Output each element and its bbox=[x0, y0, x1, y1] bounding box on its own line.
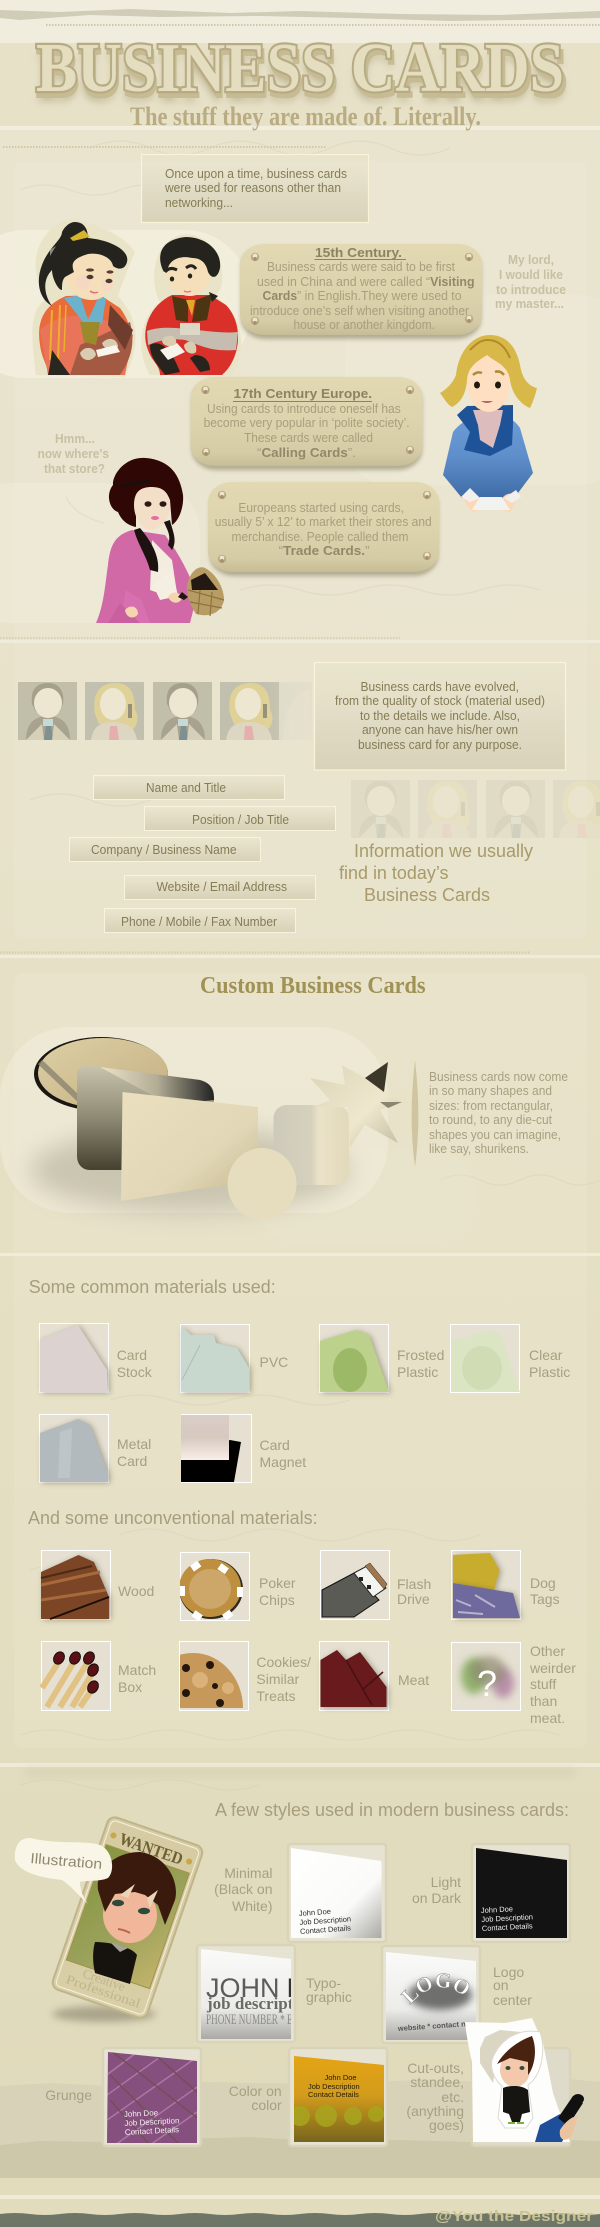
plaque: 17th century europe: Using cards to introduce oneself has bbox=[207, 401, 401, 416]
tile: metal card: Metal bbox=[117, 1436, 151, 1452]
backdrop blob behind lady bbox=[0, 483, 200, 623]
sample card: color on color: Job Description bbox=[308, 2082, 360, 2091]
evolved text box bbox=[314, 662, 566, 770]
star card bbox=[310, 1062, 402, 1147]
tile: other weird stuff bbox=[452, 1642, 576, 1726]
plaque: trade cards: merchandise. People called them bbox=[232, 529, 408, 544]
sample card: grunge bbox=[100, 2048, 201, 2146]
label: cut-outs: Cut-outs, bbox=[407, 2060, 464, 2076]
tile: meat bbox=[320, 1642, 429, 1710]
label: minimal: (Black on bbox=[214, 1881, 272, 1897]
label: phone bbox=[104, 908, 296, 932]
plaque: 15th century: introduce one’s self when visiting another bbox=[250, 303, 470, 318]
sample card: typographic: PHONE NUMBER * EMAIL bbox=[206, 2012, 316, 2028]
label: website bbox=[124, 876, 316, 900]
plaque: 15th century: 15th Century. bbox=[315, 245, 402, 260]
tile: flash drive bbox=[320, 1550, 431, 1620]
intro text box: networking... bbox=[165, 195, 233, 210]
evolved text box: business card for any purpose. bbox=[358, 737, 522, 752]
tile: cookies: Treats bbox=[256, 1688, 296, 1704]
label: logo: Logo bbox=[493, 1964, 524, 1980]
label: position: Position / Job Title bbox=[192, 812, 289, 827]
tile: pvc bbox=[180, 1324, 288, 1392]
label: name and title: Name and Title bbox=[146, 780, 226, 795]
tile: wood: Wood bbox=[118, 1583, 154, 1599]
tile: wood bbox=[41, 1550, 154, 1620]
tile: meat: Meat bbox=[398, 1672, 429, 1688]
plaque: trade cards: usually 5’ x 12’ to market their stores and bbox=[215, 514, 432, 529]
tile: clear plastic: Clear bbox=[529, 1347, 563, 1363]
sample card: minimal: Contact Details bbox=[300, 1923, 351, 1936]
sample card: minimal bbox=[288, 1844, 386, 1942]
faded figure strip right bbox=[351, 780, 600, 838]
plaque: 17th century europe: become very popular in ‘polite society’. bbox=[204, 415, 410, 430]
decorative lens divider bbox=[412, 1060, 418, 1167]
tile: poker chips bbox=[179, 1552, 296, 1621]
label: phone: Phone / Mobile / Fax Number bbox=[121, 914, 278, 929]
wanted card illustration: Professional bbox=[64, 1971, 143, 2011]
label: minimal bbox=[214, 1865, 272, 1914]
common materials heading: Some common materials used: bbox=[29, 1277, 276, 1297]
label: cut-outs bbox=[406, 2060, 464, 2133]
rounded square card bbox=[274, 1105, 349, 1185]
backdrop blob behind blonde man bbox=[345, 295, 600, 485]
label: logo: on bbox=[493, 1977, 509, 1993]
tile: frosted plastic: Plastic bbox=[397, 1364, 438, 1380]
shapes description bbox=[429, 1069, 568, 1156]
speech: my lord: My lord, bbox=[508, 252, 554, 267]
speech: my lord: to introduce bbox=[496, 282, 566, 297]
wanted card illustration: Creative bbox=[81, 1965, 127, 1994]
rounded content panel 1 bbox=[14, 161, 587, 938]
credit: @You the Designer bbox=[435, 2208, 593, 2225]
evolved text box: anyone can have his/her own bbox=[362, 722, 518, 737]
speech: my lord: I would like bbox=[499, 267, 563, 282]
sample card: minimal: John Doe bbox=[299, 1907, 331, 1918]
illustration: die-cut shapes bbox=[30, 1037, 402, 1220]
wanted card illustration: WANTED bbox=[117, 1829, 185, 1869]
subtitle: The stuff they are made of. Literally. bbox=[130, 102, 481, 131]
tile: other weird stuff: Other bbox=[530, 1643, 565, 1659]
plaque: trade cards: “Trade Cards.” bbox=[279, 543, 370, 558]
label: light on dark bbox=[412, 1874, 462, 1906]
tile: other weird stuff: ? bbox=[477, 1663, 497, 1704]
tile: cookies: Similar bbox=[256, 1671, 300, 1687]
illustration: blonde gentleman bbox=[440, 335, 537, 512]
label: minimal: White) bbox=[232, 1898, 272, 1914]
sample card: light on dark: Contact Details bbox=[482, 1921, 533, 1933]
sample card: cut-outs bbox=[465, 2018, 584, 2146]
egg shaped card bbox=[228, 1148, 296, 1220]
tile: metal card bbox=[40, 1414, 151, 1482]
tile: dog tags bbox=[452, 1550, 560, 1620]
backdrop pill behind shapes bbox=[0, 1027, 388, 1213]
information heading: Information we usually bbox=[354, 841, 533, 861]
tile: frosted plastic bbox=[320, 1324, 444, 1392]
evolved text box: from the quality of stock (material used) bbox=[335, 693, 545, 708]
shapes description: sizes: from rectangular, bbox=[429, 1098, 553, 1113]
label: light on dark: Light bbox=[431, 1874, 461, 1890]
tile: match box: Match bbox=[118, 1662, 156, 1678]
label: logo: center bbox=[493, 1992, 532, 2008]
label: position bbox=[144, 806, 336, 830]
top torn paper strip bbox=[0, 0, 600, 43]
sample card: logo bbox=[381, 1945, 481, 2044]
label: typographic bbox=[306, 1975, 352, 2005]
plaque: trade cards: Europeans started using cards, bbox=[238, 500, 404, 515]
tile: cookies bbox=[179, 1641, 311, 1711]
tile: card stock: Stock bbox=[117, 1364, 153, 1380]
label: cut-outs: standee, bbox=[410, 2074, 464, 2090]
tile: dog tags: Dog bbox=[530, 1575, 556, 1591]
label: color on color bbox=[229, 2083, 282, 2113]
tile: card magnet bbox=[181, 1414, 306, 1482]
plaque: 15th century bbox=[240, 244, 482, 339]
plaque: 17th century europe: These cards were called bbox=[244, 430, 373, 445]
label: grunge: Grunge bbox=[45, 2087, 92, 2103]
rounded content panel 2 bbox=[14, 973, 587, 1748]
illustration: Chinese man bbox=[141, 234, 241, 375]
speech: hmm: that store? bbox=[44, 461, 105, 476]
speech: hmm: Hmm... bbox=[55, 431, 95, 446]
tile: metal card: Card bbox=[117, 1453, 147, 1469]
tile: flash drive: Drive bbox=[397, 1591, 430, 1607]
sample card: light on dark bbox=[472, 1844, 570, 1942]
shapes description: Business cards now come bbox=[429, 1069, 568, 1084]
wanted card illustration bbox=[51, 1815, 204, 2022]
illustration: lady with basket bbox=[96, 458, 224, 623]
tile: card stock bbox=[40, 1324, 153, 1392]
shapes description: shapes you can imagine, bbox=[429, 1127, 561, 1142]
tile: clear plastic: Plastic bbox=[529, 1364, 570, 1380]
illustration speech bubble: Illustration bbox=[30, 1851, 103, 1873]
dark rounded card bbox=[77, 1065, 214, 1170]
speech: my lord bbox=[495, 252, 566, 311]
tile: poker chips: Chips bbox=[259, 1592, 295, 1608]
sample card: grunge: Contact Details bbox=[125, 2125, 179, 2137]
tile: match box: Box bbox=[118, 1679, 142, 1695]
cutout character bbox=[492, 2031, 543, 2128]
header band bbox=[0, 43, 600, 126]
backdrop blob behind Chinese couple bbox=[0, 230, 250, 378]
shapes description: like say, shurikens. bbox=[429, 1141, 529, 1156]
sample card: grunge: Job Description bbox=[124, 2116, 180, 2128]
label: logo bbox=[493, 1964, 532, 2008]
label: color on color: Color on bbox=[229, 2083, 282, 2099]
information heading: find in today’s bbox=[339, 863, 448, 883]
tile: card magnet: Card bbox=[260, 1437, 290, 1453]
information heading: Business Cards bbox=[364, 885, 490, 905]
plaque: 17th century europe: “Calling Cards”. bbox=[257, 445, 356, 460]
plaque: 17th century europe: 17th Century Europe. bbox=[234, 386, 372, 401]
round card bbox=[34, 1037, 168, 1111]
sample card: light on dark: John Doe bbox=[481, 1904, 513, 1915]
sample card: color on color: John Doe bbox=[324, 2073, 357, 2082]
hand with marker bbox=[535, 2094, 584, 2142]
label: typographic: Typo- bbox=[306, 1975, 341, 1991]
information heading bbox=[339, 841, 533, 905]
label: cut-outs: (anything bbox=[406, 2103, 464, 2119]
label: minimal: Minimal bbox=[224, 1865, 272, 1881]
sample card: grunge: John Doe bbox=[124, 2108, 159, 2119]
illustration: Chinese woman bbox=[32, 218, 135, 377]
plaque: 15th century: house or another kingdom. bbox=[294, 317, 435, 332]
handwriting texture bbox=[20, 141, 600, 1790]
label: company: Company / Business Name bbox=[91, 842, 236, 857]
custom cards heading: Custom Business Cards bbox=[200, 973, 426, 999]
intro text box: were used for reasons other than bbox=[164, 180, 341, 195]
label: company bbox=[70, 838, 260, 862]
bottom torn bands bbox=[0, 2078, 600, 2227]
sample card: light on dark: Job Description bbox=[481, 1912, 533, 1924]
intro text box bbox=[142, 154, 368, 222]
intro text box: Once upon a time, business cards bbox=[165, 166, 347, 181]
tile: poker chips: Poker bbox=[259, 1575, 296, 1591]
sample card: typographic bbox=[196, 1944, 296, 2042]
sample card: color on color: Contact Details bbox=[308, 2090, 359, 2099]
sample card: logo: LOGO bbox=[400, 1973, 470, 2005]
tile: frosted plastic: Frosted bbox=[397, 1347, 444, 1363]
label: name and title bbox=[94, 776, 284, 800]
evolved text box: to the details we include. Also, bbox=[360, 708, 520, 723]
tile: match box bbox=[42, 1642, 156, 1710]
speech: hmm bbox=[38, 431, 109, 523]
tile: clear plastic bbox=[450, 1324, 570, 1392]
label: typographic: graphic bbox=[306, 1989, 352, 2005]
sample card: typographic: job description bbox=[206, 1994, 317, 2013]
speech: hmm: now where's bbox=[38, 446, 109, 461]
tile: pvc: PVC bbox=[260, 1354, 288, 1370]
tile: card magnet: Magnet bbox=[260, 1454, 306, 1470]
plaque: 15th century: Business cards were said to be first bbox=[267, 259, 455, 274]
faded figure strip left bbox=[18, 682, 312, 740]
shapes description: in so many shapes and bbox=[429, 1083, 552, 1098]
plaque: 15th century: Cards” in English.They were used to bbox=[262, 288, 462, 303]
plaque: 15th century: used in China and were called “Visiting bbox=[257, 274, 475, 289]
shapes description: to round, to any die-cut bbox=[429, 1112, 552, 1127]
tile: other weird stuff: than bbox=[530, 1693, 557, 1709]
illustration speech bubble bbox=[15, 1838, 112, 1904]
tile: other weird stuff: meat. bbox=[530, 1710, 565, 1726]
sample card: logo: website * contact no. bbox=[397, 2019, 473, 2033]
tile: dog tags: Tags bbox=[530, 1591, 560, 1607]
label: website: Website / Email Address bbox=[156, 879, 287, 894]
label: light on dark: on Dark bbox=[412, 1890, 462, 1906]
tile: other weird stuff: weirder bbox=[529, 1660, 576, 1676]
tile: cookies: Cookies/ bbox=[256, 1654, 311, 1670]
sample card: minimal: Job Description bbox=[299, 1914, 351, 1927]
plaque: 17th century europe bbox=[190, 377, 422, 470]
label: cut-outs: etc. bbox=[441, 2089, 464, 2105]
tile: flash drive: Flash bbox=[397, 1576, 431, 1592]
sample card: typographic: JOHN DOE bbox=[206, 1973, 346, 2003]
rectangular card bbox=[121, 1092, 258, 1201]
tile: card stock: Card bbox=[117, 1347, 147, 1363]
label: color on color: color bbox=[251, 2097, 282, 2113]
evolved text box: Business cards have evolved, bbox=[360, 679, 519, 694]
tile: other weird stuff: stuff bbox=[530, 1676, 556, 1692]
unconventional heading: And some unconventional materials: bbox=[28, 1508, 318, 1528]
modern styles heading: A few styles used in modern business cards: bbox=[215, 1800, 569, 1820]
plaque: trade cards bbox=[208, 482, 439, 576]
label: cut-outs: goes) bbox=[429, 2117, 464, 2133]
speech: my lord: my master... bbox=[495, 296, 564, 311]
sample card: color on color bbox=[289, 2048, 387, 2146]
